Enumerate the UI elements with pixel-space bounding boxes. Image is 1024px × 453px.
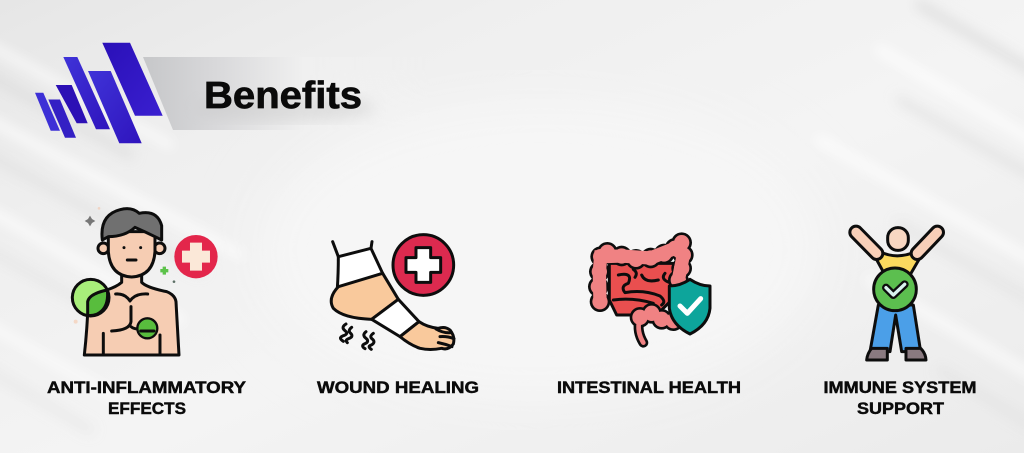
- legs: [870, 305, 921, 352]
- pain squiggles: [340, 324, 374, 349]
- shield with check: [669, 279, 710, 334]
- shoes: [867, 348, 926, 360]
- icon: raised arms figure: [856, 228, 937, 360]
- large green patch: [72, 279, 109, 316]
- medical cross badge: [393, 235, 454, 295]
- large intestine outline: [588, 232, 694, 331]
- upper bandage: [337, 248, 383, 288]
- foot: [331, 273, 398, 319]
- facial features: [122, 246, 142, 260]
- label: immune system support: SUPPORT: [857, 400, 944, 418]
- title banner: [143, 57, 430, 130]
- head: [888, 228, 908, 250]
- body: [84, 275, 179, 355]
- green check badge: [874, 268, 916, 311]
- label: anti-inflammatory effects: ANTI-INFLAMMATORY: [47, 379, 246, 397]
- label: immune system support: IMMUNE SYSTEM: [824, 379, 976, 397]
- label: intestinal health: INTESTINAL HEALTH: [557, 379, 741, 397]
- hair: [102, 209, 162, 240]
- chest lines: [103, 294, 160, 354]
- heading: Benefits: [204, 75, 362, 117]
- medical cross badge: [174, 235, 218, 278]
- small intestine: [609, 263, 677, 315]
- label: anti-inflammatory effects: EFFECTS: [108, 400, 186, 418]
- shirt: [875, 252, 921, 275]
- logo: slanted bars: [35, 43, 163, 143]
- sparkle and dots: [74, 207, 175, 324]
- icon: bandaged foot: [331, 235, 454, 349]
- face: [108, 232, 155, 277]
- ears: [98, 243, 109, 254]
- large intestine fill: [591, 235, 691, 328]
- lower bandage: [372, 299, 419, 337]
- label: wound healing: WOUND HEALING: [317, 379, 479, 397]
- icon: man with inflammation: [72, 207, 218, 355]
- forefoot and toes: [400, 322, 454, 349]
- arms: [856, 232, 937, 253]
- small green patch: [137, 318, 157, 338]
- icon: intestines with shield: [588, 232, 710, 343]
